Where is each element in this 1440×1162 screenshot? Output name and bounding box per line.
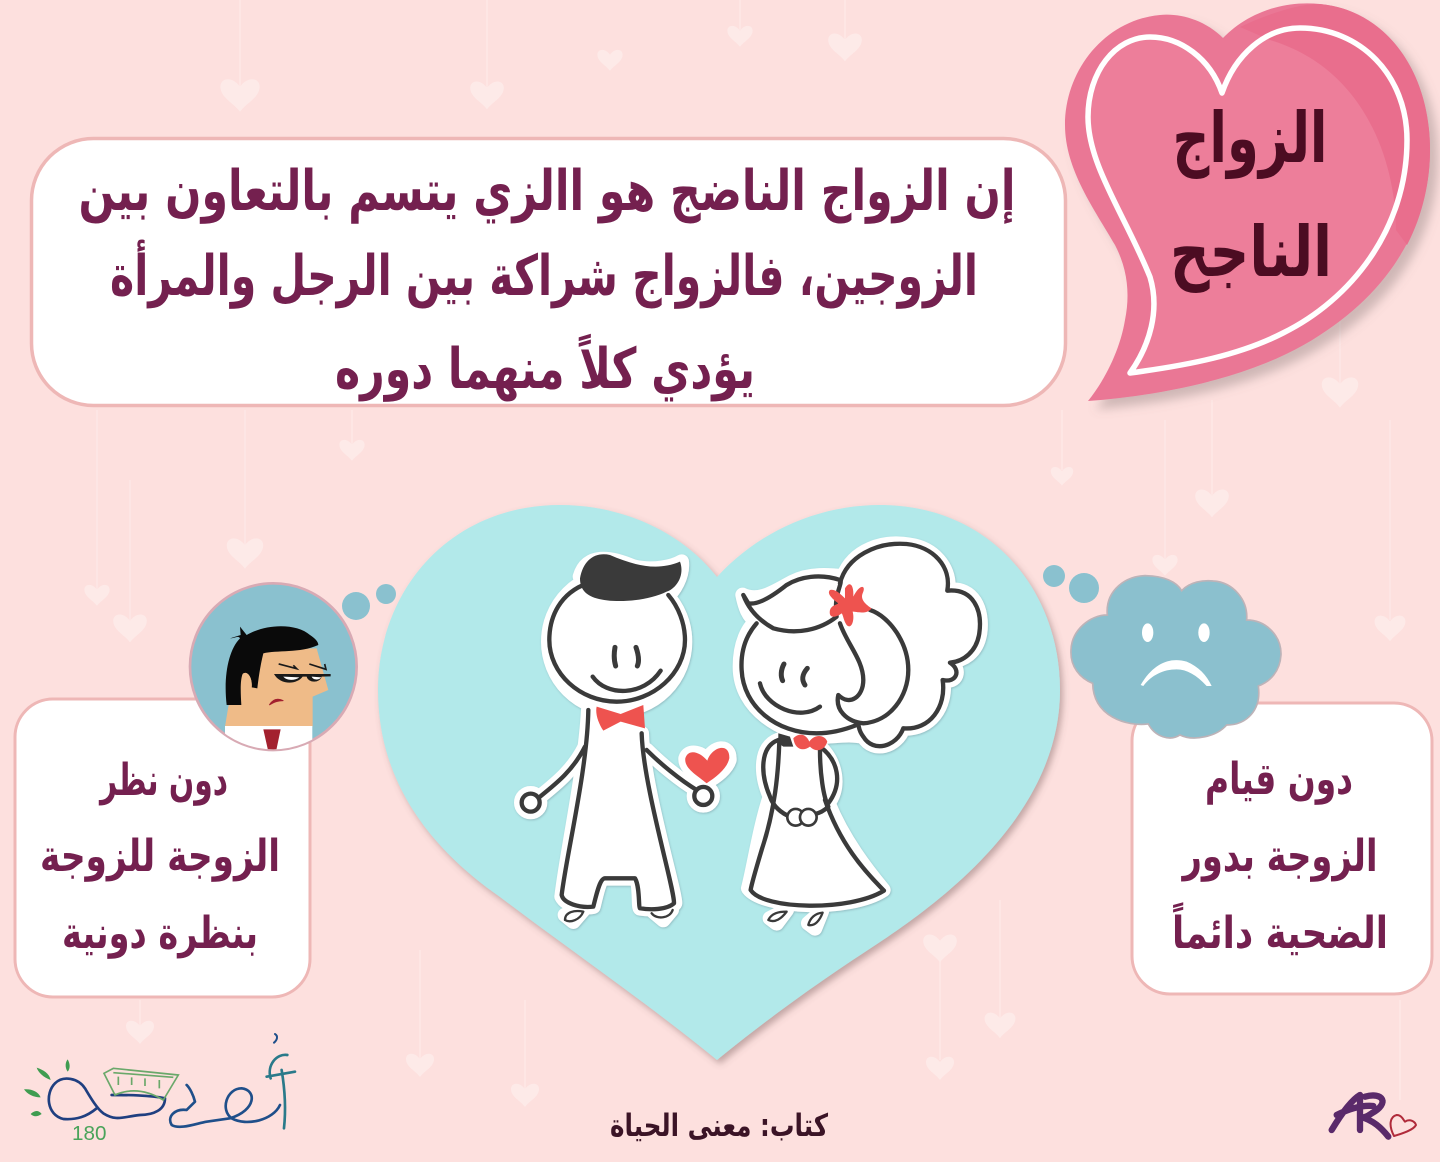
- thought bubbles: left: [342, 584, 396, 620]
- couple illustration: [521, 544, 981, 928]
- intro text: [78, 159, 1016, 402]
- logo: AR signature: [1332, 1095, 1416, 1137]
- left note text: [40, 755, 280, 959]
- footer source text: كتاب: معنى الحياة: [610, 1108, 829, 1144]
- icon: angry man avatar: [190, 583, 357, 757]
- panel: right note: [1132, 703, 1432, 994]
- small heart: [685, 748, 729, 783]
- left note text: الزوجة للزوجة: [40, 831, 280, 882]
- intro text: إن الزواج الناضج هو االزي يتسم بالتعاون بين: [78, 159, 1016, 224]
- right note text: [1172, 754, 1388, 959]
- right note text: الضحية دائماً: [1172, 901, 1388, 959]
- bride bow: [793, 735, 827, 750]
- right note text: دون قيام: [1205, 754, 1353, 805]
- title heart badge: [1065, 3, 1430, 401]
- flower: [829, 584, 872, 626]
- logo: left brand: [24, 1034, 295, 1145]
- right note text: الزوجة بدور: [1181, 831, 1378, 882]
- left note text: دون نظر: [99, 755, 228, 806]
- title text: الزواج: [1172, 97, 1328, 179]
- groom: [521, 554, 729, 922]
- icon: sad cloud: [1071, 576, 1281, 738]
- intro text: الزوجين، فالزواج شراكة بين الرجل والمرأة: [110, 239, 978, 309]
- panel: intro text box: [32, 138, 1066, 406]
- thought bubbles: right: [1043, 565, 1099, 603]
- intro text: يؤدي كلاً منهما دوره: [335, 333, 755, 402]
- title text: [1170, 97, 1332, 293]
- logo: left brand: 180: [72, 1122, 106, 1145]
- bride: [740, 544, 981, 928]
- central heart: [378, 505, 1060, 1060]
- title text: الناجح: [1170, 211, 1332, 293]
- left note text: بنظرة دونية: [62, 908, 258, 959]
- bow tie: [596, 705, 645, 731]
- panel: left note: [15, 699, 310, 997]
